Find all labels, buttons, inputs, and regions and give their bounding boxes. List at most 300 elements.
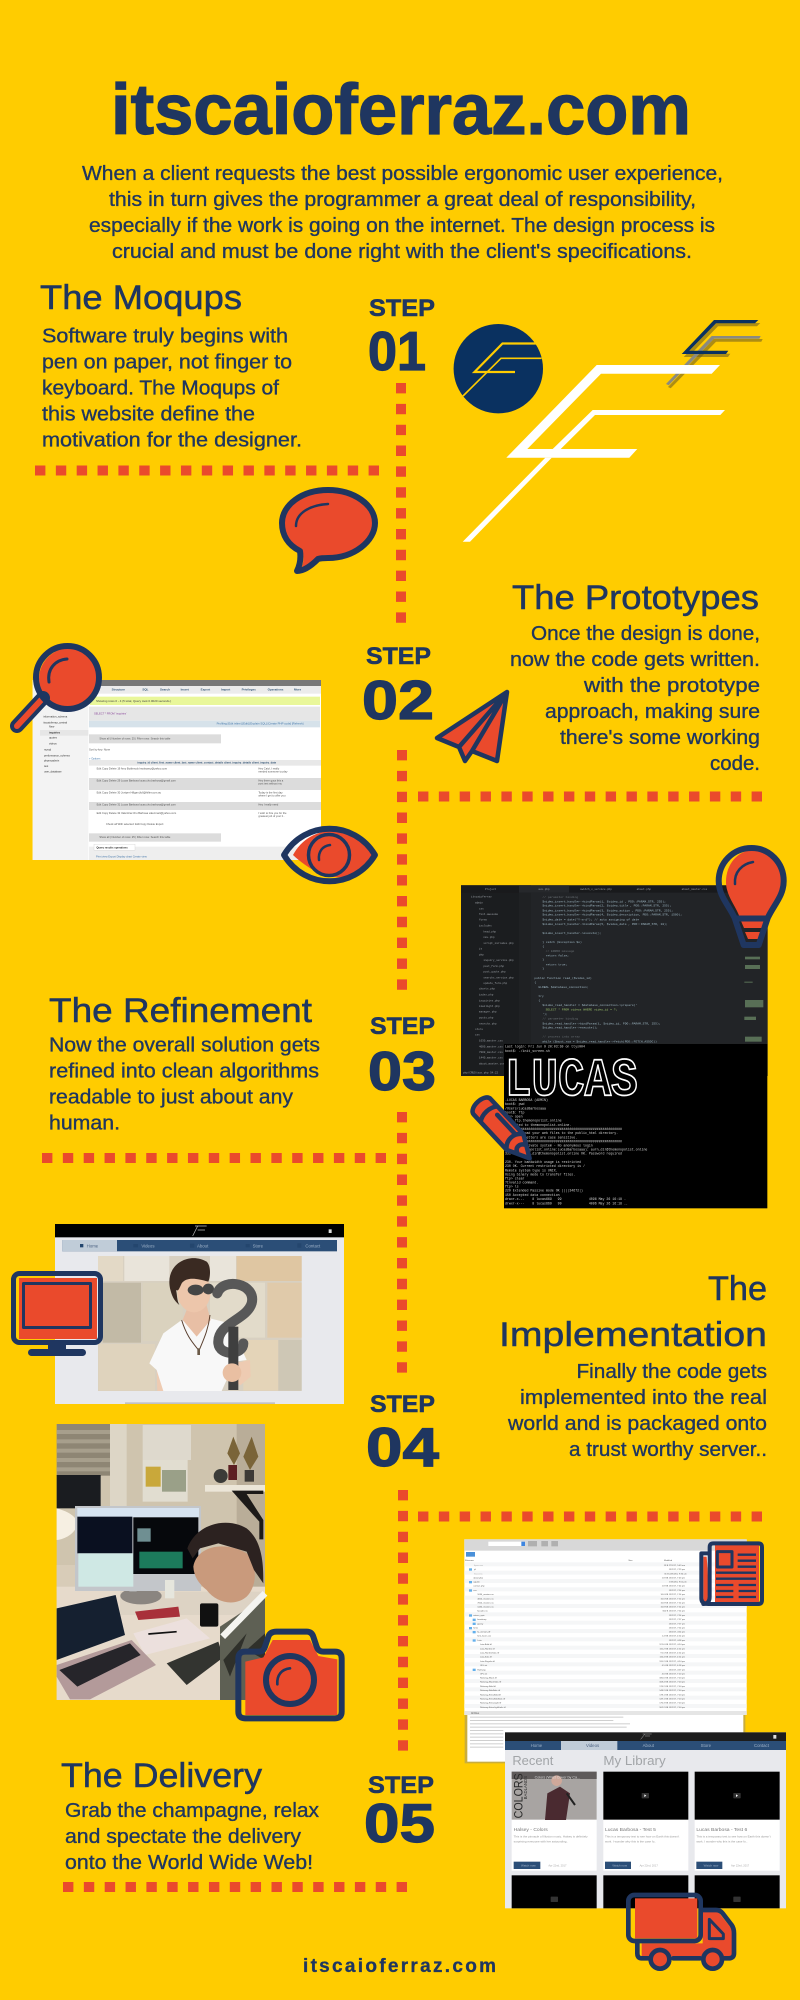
screenshot: database admin table: SELECT * FROM `inquiries` [94, 712, 127, 716]
screenshot: database admin table: test [44, 764, 49, 768]
screenshot: website video library: Colors (Wrist Cover by Ca... [535, 1776, 580, 1780]
screenshot: code editor: post_form.php [483, 964, 504, 968]
photo: developer at desk [57, 1424, 265, 1700]
screenshot: file transfer client: jquery [476, 1622, 484, 1625]
screenshot: file transfer client: Lato [477, 1639, 482, 1642]
screenshot: code editor: try [538, 994, 544, 998]
screenshot: code editor: nav.php [483, 935, 495, 939]
screenshot: website video library: Halsey - Colors [514, 1827, 548, 1833]
heading: The Implementation: The [708, 1270, 767, 1308]
screenshot: file transfer client: fa_version_tff [477, 1631, 491, 1634]
screenshot: code editor: css [479, 907, 484, 910]
screenshot: file transfer client: Filename [465, 1560, 475, 1562]
screenshot: file transfer client: ftpaccess [474, 1564, 483, 1567]
screenshot: code editor: } [542, 967, 544, 971]
screenshot: terminal: Connected to themonopolist.online. [505, 1123, 571, 1127]
icon: paper plane [437, 691, 508, 761]
screenshot: code editor: switch_x_service.php [580, 887, 612, 891]
screenshot: file transfer client: 13/2/17, 7:54 pm [669, 1627, 685, 1629]
screenshot: database admin table: greatest job of your li.. [258, 814, 285, 818]
screenshot: file transfer client: 178.1 KB 13/2/17, 7:00 pm [659, 1694, 685, 1696]
screenshot: database admin table: quotes [49, 736, 58, 740]
screenshot: terminal: boot$: ./init_screen.sh [505, 1049, 550, 1053]
screenshot: file transfer client: 4000_master.css [477, 1597, 494, 1600]
text: step 2 description: Once the design is done, [531, 623, 760, 645]
screenshot: code editor [461, 885, 768, 1076]
screenshot: code editor: $video_read_handler->execute(); [542, 1026, 598, 1030]
screenshot: website video library: This is a temporary test to see how on Earth this doesn't [696, 1835, 771, 1839]
screenshot: code editor: 4000_master.css [479, 1044, 503, 1048]
screenshot: code editor: font-awesome [479, 912, 499, 916]
text: step 1 description: motivation for the designer. [42, 430, 302, 452]
screenshot: terminal: This is a private system - No anonymous login [505, 1143, 593, 1147]
step label 01: STEP [369, 295, 435, 322]
screenshot: website video library [505, 1732, 786, 1908]
screenshot: file transfer client: 10.8 KB 13/2/17, 7:54 pm [661, 1602, 685, 1604]
screenshot: file transfer client: OFL.txt [480, 1672, 487, 1675]
heading: The Implementation: Implementation [499, 1316, 767, 1354]
screenshot: code editor: store [475, 1027, 483, 1031]
screenshot: website video library: work. I wonder why this is the case fo.. [696, 1839, 748, 1843]
screenshot: file transfer client: bootstrap [477, 1618, 487, 1621]
screenshot: database admin table: Insert [181, 688, 189, 692]
screenshot: website video library: BADLANDS [523, 1776, 528, 1799]
screenshot: database admin table: performance_schema [44, 753, 70, 757]
screenshot: file transfer client: cgi-bin [473, 1582, 480, 1584]
screenshot: file transfer client: 13/2/17, 4:54 pm [669, 1632, 685, 1634]
screenshot: terminal: ############################################################ [505, 1127, 622, 1131]
screenshot: terminal: 230 OK. Current restricted directory is / [505, 1164, 585, 1168]
screenshot: file transfer client [464, 1539, 747, 1763]
screenshot: terminal: boot$: ftp [505, 1110, 525, 1114]
screenshot: file transfer client: All Files [471, 1712, 480, 1715]
screenshot: code editor: searchx.php [479, 1021, 497, 1025]
screenshot: code editor: php/CRUD/aux.php 54:22 [463, 1070, 498, 1074]
screenshot: website video library: Watch now [704, 1863, 719, 1867]
screenshot: file transfer client: 13/2/17, 7:29 pm [669, 1569, 685, 1571]
screenshot: database admin table: Privileges [242, 688, 256, 692]
step label 04: STEP [370, 1391, 435, 1418]
screenshot: file transfer client: css [473, 1590, 477, 1592]
icon: pencil [469, 1094, 538, 1166]
screenshot: website video library: Lucas Barbosa - Test 5 [605, 1827, 656, 1833]
text: step 3 description: readable to just about any [49, 1086, 293, 1108]
screenshot: file transfer client: 13/2/17, 7:57 pm [669, 1619, 685, 1621]
screenshot: terminal: drwxr-x--- 8 lucas669 99 4096 May 26 16:18 . [505, 1197, 626, 1201]
screenshot: terminal: drwxr-x--- 8 lucas669 99 4096 May 26 16:18 .. [505, 1201, 628, 1205]
screenshot: database admin table: Edit Copy Delete 32 Valentina Chu Barbosa valenmart@yahoo.com [97, 811, 177, 815]
screenshot: database admin table: Edit Copy Delete 19 Amy Bottlerock heyitsamy@yahoo.com [97, 766, 168, 770]
screenshot: file transfer client: contact.php [473, 1585, 485, 1588]
screenshot: website video library: Home [531, 1743, 543, 1748]
screenshot: file transfer client: 4.6 KB 13/2/17, 7:00 pm [662, 1673, 685, 1675]
screenshot: code editor: inquiry_service.php [483, 958, 514, 962]
step label 03: STEP [370, 1013, 435, 1040]
text: step 2 description: approach, making sure [545, 701, 760, 723]
screenshot: website video library: Videos [586, 1743, 599, 1748]
screenshot: code editor: update_form.php [483, 981, 508, 985]
screenshot: database admin table: Check all With selected: Edit Copy Delete Export [106, 822, 164, 826]
panel: step 3 The Refinement [49, 992, 436, 1134]
screenshot: database admin table: phpmyadmin [44, 759, 60, 763]
heading: The Implementation [499, 1270, 767, 1354]
intro paragraph: this in turn gives the programmer a great deal of responsibility, [109, 189, 696, 211]
screenshot: file transfer client: htaccess [474, 1572, 483, 1575]
screenshot: database admin table: inquiry_id client_first_name client_last_name client_contact_details client_inquiry_details client_inquiry_date [137, 761, 277, 765]
screenshot: file transfer client: jd [473, 1569, 476, 1571]
text: step 5 description [65, 1800, 319, 1874]
screenshot: file transfer client: 176.3 KB 13/2/17, 7:00 pm [659, 1703, 685, 1705]
screenshot: terminal: Please upload your web files to the public_html directory. [505, 1131, 618, 1135]
screenshot: file transfer client: fonts [473, 1626, 478, 1629]
text: step 5 description: and spectate the delivery [65, 1826, 301, 1848]
screenshot: code editor: searchx_service.php [483, 975, 514, 979]
step label 05: 05 [364, 1792, 435, 1854]
screenshot: file transfer client: 91.5 KB 13/2/17, 4:54 pm [661, 1652, 685, 1654]
screenshot: terminal: ftp> ls [505, 1185, 519, 1189]
screenshot: database admin table: where I get to offer you [258, 793, 286, 797]
text: step 4 description: a trust worthy server.. [569, 1439, 767, 1461]
text: step 2 description: now the code gets written. [510, 649, 760, 671]
screenshot: code editor: // ERROR message [546, 949, 575, 953]
screenshot: file transfer client: Lato-Italic.ttf [480, 1656, 492, 1659]
step label 02: 02 [362, 669, 434, 731]
icon: delivery truck [628, 1895, 734, 1969]
screenshot: database admin table: Edit Copy Delete 31 Lucas Barbosa lucas.chu.barbosa@gmail.com [97, 802, 177, 806]
screenshot: file transfer client: 600 B 13/2/17, 7:54 pm [663, 1611, 685, 1613]
screenshot: database admin table: Show all | Number of rows: 25 | Filter rows: Search this table [99, 835, 171, 839]
screenshot: website video library: Recent [512, 1753, 554, 1768]
screenshot: file transfer client: 4.5 KB 13/2/17, 4:58 pm [662, 1665, 685, 1667]
screenshot: website video library: This is the pinnacle of Illusion music. Halsey is definitely [514, 1835, 588, 1839]
screenshot: website video library: Apr 22nd, 2017 [548, 1864, 567, 1868]
logo: small dark F mark [666, 320, 763, 388]
screenshot: code editor: script_includes.php [483, 941, 514, 945]
panel: step 2 The Prototypes [362, 579, 760, 775]
screenshot: file transfer client: 1440_master.css [477, 1606, 494, 1609]
screenshot: code editor: { [542, 944, 544, 948]
text: step 3 description: refined into clean algorithms [49, 1060, 319, 1082]
photo: man with electric violin [98, 1256, 302, 1391]
screenshot: code editor: '); [542, 1012, 548, 1016]
step label 05: STEP [368, 1772, 434, 1799]
screenshot: website home page: Videos [141, 1243, 154, 1248]
footer url: itscaioferraz.com [303, 1956, 496, 1977]
screenshot: code editor: return false; [546, 953, 569, 957]
screenshot: website video library: Watch now [612, 1863, 628, 1867]
screenshot: database admin table: videos [49, 741, 57, 745]
screenshot: terminal: Remote system type is UNIX. [505, 1168, 558, 1172]
text: step 4 description [507, 1361, 767, 1461]
screenshot: database admin table: Hey Caiol, I really [258, 766, 280, 770]
screenshot: file transfer client: 116.4 KB 13/2/17, 4:54 pm [659, 1657, 685, 1659]
screenshot: website video library: Apr 22nd, 2017 [640, 1864, 658, 1868]
text: step 4 description: implemented into the real [520, 1387, 767, 1409]
screenshot: database admin table: Print view Export Display chart Create view [96, 855, 147, 859]
text: step 3 description [49, 1034, 320, 1134]
screenshot: file transfer client: Size [628, 1560, 633, 1562]
screenshot: file transfer client: 13 B 27/5/17, 5:49 am [664, 1565, 685, 1567]
screenshot: code editor: while ($must_row = $video_read_handler->fetch(PDO::FETCH_ASSOC)) [542, 1039, 657, 1043]
screenshot: file transfer client: 115.2 KB 13/2/17, 4:54 pm [659, 1648, 685, 1650]
screenshot: terminal: (to) ftp.themonopolist.online [505, 1119, 562, 1123]
screenshot: file transfer client: 1030_master.css [477, 1593, 494, 1596]
screenshot: terminal: Note that letters are case sensitive. [505, 1135, 577, 1139]
screenshot: code editor: public function read_($video_id) [534, 976, 592, 980]
screenshot: file transfer client: facade.css [477, 1611, 488, 1613]
icon: newspaper [701, 1543, 762, 1604]
screenshot: website video library: About [643, 1743, 655, 1748]
screenshot: website video library: work. I wonder why this is the case fo.. [605, 1839, 656, 1843]
screenshot: file transfer client: about.php [473, 1576, 484, 1579]
screenshot: database admin table: inquiries [49, 730, 61, 734]
screenshot: database admin table: New [49, 725, 54, 729]
screenshot: terminal: ftp> open [505, 1115, 523, 1119]
screenshot: file transfer client: 1.8 KB 13/2/17, 7:44 pm [662, 1586, 685, 1588]
screenshot: website video library: This is a temporary test to see how on Earth this doesn't [605, 1835, 679, 1839]
screenshot: database admin table: user_database [44, 770, 62, 774]
screenshot: code editor: posts.php [479, 1016, 494, 1020]
screenshot: file transfer client: 162.2 KB 13/2/17, 7:00 pm [659, 1707, 685, 1709]
screenshot: code editor: $video_insert_handler->execute(); [542, 931, 602, 935]
screenshot: database admin table: Profiling [Edit inline] [Edit] [Explain SQL] [Create PHP code] [Refresh] [217, 721, 304, 725]
screenshot: database admin table: Query results operations [96, 845, 128, 849]
screenshot: file transfer client: Modified [664, 1560, 673, 1562]
screenshot: website video library: Watch now [521, 1863, 536, 1867]
screenshot: database admin table: itscaioferraz_central [43, 720, 68, 724]
screenshot: terminal [504, 1044, 767, 1208]
screenshot: file transfer client: 148.2 KB 13/2/17, 7:00 pm [659, 1690, 685, 1692]
screenshot: code editor: { [534, 980, 536, 984]
screenshot: code editor: index.php [479, 993, 494, 997]
intro paragraph [82, 163, 723, 263]
screenshot: file transfer client: Lato-HairlineItalic.ttf [480, 1651, 499, 1654]
screenshot: database admin table: + Options [89, 756, 101, 760]
intro paragraph: When a client requests the best possible ergonomic user experience, [82, 163, 723, 185]
screenshot: code editor: aux.php [538, 887, 550, 891]
icon: magnifying glass [17, 646, 101, 726]
screenshot: website video library: My Library [603, 1753, 666, 1768]
screenshot: file transfer client: 168.4 KB 13/2/17, 7:00 pm [659, 1682, 685, 1684]
screenshot: code editor: // parameter binding [542, 1017, 578, 1021]
step label 02 [362, 643, 434, 731]
screenshot: database admin table: Structure [112, 688, 125, 692]
screenshot: file transfer client: 7000_master.css [477, 1601, 494, 1604]
screenshot: file transfer client: 31 B 22/10/16, 9:30 am [664, 1573, 687, 1575]
screenshot: terminal: LUCAS [505, 1052, 638, 1112]
screenshot: website video library: surprising everyone with her astounding.. [514, 1839, 568, 1843]
intro paragraph: especially if the work is going on the internet. The design process is [89, 215, 715, 237]
text: step 1 description: pen on paper, not finger to [42, 352, 292, 374]
screenshot: code editor: $video_date = date("Y-m-d"); // auto assigning of date [542, 917, 639, 921]
text: step 1 description: Software truly begins with [42, 326, 288, 348]
screenshot: code editor: 1030_master.css [479, 1038, 503, 1042]
screenshot: code editor: itscaioferraz [471, 894, 492, 898]
screenshot: database admin table: post test without my [258, 781, 282, 785]
screenshot: code editor: // parameter binding [542, 895, 578, 899]
screenshot: database admin table: Hey I really need [258, 802, 279, 806]
screenshot: database admin table: Sort by key: None [89, 747, 111, 751]
screenshot: code editor: inquiries.php [479, 998, 500, 1002]
screenshot: file transfer client: Raleway-BoldItalic.ttf [480, 1689, 501, 1692]
screenshot: file transfer client: 10.6 KB 13/2/17, 7:54 pm [661, 1594, 685, 1596]
dotted vertical timeline [35, 383, 763, 1887]
screenshot: database admin table: Edit Copy Delete 29 Lucas Barbosa lucas.chu.barbosa@gmail.com [97, 778, 177, 782]
screenshot: database admin table: Operations [268, 688, 284, 692]
screenshot: code editor: return true; [546, 962, 567, 966]
screenshot: code editor: manager.php [479, 1010, 497, 1014]
screenshot: code editor: js [479, 947, 483, 951]
screenshot: code editor: $video_insert_handler->bindParam(4, $video_description, PDO::PARAM_STR, 1500); [542, 913, 682, 917]
screenshot: file transfer client: extern_apis [473, 1614, 484, 1617]
screenshot: code editor: $video_insert_handler->bindParam(1, $video_id , PDO::PARAM_STR, 255); [542, 899, 666, 903]
screenshot: website video library: Apr 22nd, 2017 [731, 1864, 750, 1868]
step label 03 [368, 1013, 436, 1102]
step label 02: STEP [366, 643, 431, 670]
text: step 1 description: this website define the [42, 404, 255, 426]
icon: monitor [14, 1274, 100, 1356]
screenshot: file transfer client: 13/2/17, 7:57 pm [669, 1623, 685, 1625]
screenshot: file transfer client: 176.2 KB 13/2/17, 7:00 pm [659, 1686, 685, 1688]
icon: light bulb [719, 848, 785, 945]
screenshot: code editor: Project [485, 887, 497, 891]
screenshot: file transfer client: 1.8 KB 13/2/17, 7:43 pm [662, 1577, 685, 1579]
heading: The Delivery: The Delivery [61, 1757, 262, 1795]
screenshot: file transfer client: 13/2/17, 4:57 pm [669, 1669, 685, 1671]
screenshot: database admin table: Show all | Number of rows: 25 | Filter rows: Search this table [99, 737, 171, 741]
screenshot: code editor: $video_read_handler = $database_connection->prepare(' [542, 1003, 637, 1007]
screenshot: database admin table: Search [160, 688, 170, 692]
screenshot: code editor: } catch (Exception $e) [542, 940, 582, 944]
text: step 2 description [510, 623, 760, 775]
screenshot: terminal: /Users/LucasBarbosaaa [505, 1106, 546, 1110]
screenshot: database admin table: mysql [44, 748, 51, 752]
screenshot: terminal: ############################################################ [505, 1139, 622, 1143]
screenshot: code editor: about_master.css [479, 1061, 505, 1065]
text: step 5 description: onto the World Wide Web! [65, 1852, 313, 1874]
screenshot: file transfer client: 10.8 KB 13/2/17, 7:54 pm [661, 1607, 685, 1609]
step label 05 [364, 1772, 435, 1854]
screenshot: database admin table [33, 680, 321, 860]
step label 04 [366, 1391, 439, 1478]
screenshot: database admin table: Today is the first day [258, 790, 283, 794]
screenshot: code editor: { [538, 998, 540, 1002]
screenshot: code editor: 1440_master.css [479, 1056, 503, 1060]
screenshot: database admin table: Hey there guys this a [258, 778, 284, 782]
screenshot: terminal: ?Invalid command. [505, 1181, 538, 1185]
screenshot: code editor: about_master.css [682, 887, 708, 891]
screenshot: website home page: Contact [305, 1243, 321, 1248]
screenshot: database admin table: information_schema [43, 715, 68, 719]
screenshot: code editor: admin [475, 900, 483, 904]
screenshot: terminal: Using binary mode to transfer files. [505, 1172, 575, 1176]
panel: step 4 The Implementation [366, 1270, 767, 1478]
text: step 1 description [42, 326, 302, 452]
screenshot: file transfer client: 149.1 KB 13/2/17, 7:00 pm [659, 1698, 685, 1700]
screenshot: code editor: post_quote.php [483, 970, 506, 974]
text: step 2 description: code. [710, 753, 760, 775]
screenshot: database admin table: SQL [142, 688, 149, 692]
screenshot: database admin table: Edit Copy Delete 30 Juniper Hillgan jfoll@hifier.com.au [97, 790, 162, 794]
step label 01 [368, 295, 435, 382]
heading: The Moqups: The Moqups [40, 279, 242, 317]
icon: camera [238, 1632, 342, 1718]
intro paragraph: crucial and must be done right with the client's specifications. [112, 241, 692, 263]
screenshot: database admin table: More [294, 688, 301, 692]
screenshot: terminal: -LUCAS BARBOSA (ADMIN) [505, 1098, 548, 1102]
screenshot: code editor: $video_insert_handler->bindParam(5, $video_date , PDO::PARAM_STR, 10); [542, 922, 668, 926]
text: step 1 description: keyboard. The Moqups of [42, 378, 279, 400]
screenshot: website home page: Store [253, 1243, 264, 1248]
text: step 3 description: human. [49, 1112, 120, 1134]
screenshot: file transfer client: Raleway-ExtraLightItalic.ttf [480, 1706, 506, 1709]
screenshot: website home page: About [197, 1243, 209, 1248]
screenshot: file transfer client: 13/2/17, 7:54 pm [669, 1590, 685, 1592]
screenshot: file transfer client: 19/10/16, 9:01 pm [669, 1582, 687, 1584]
screenshot: file transfer client: Raleway [477, 1669, 487, 1671]
screenshot: file transfer client: Lato-Regular.ttf [480, 1660, 495, 1663]
screenshot: database admin table: Export [201, 688, 210, 692]
screenshot: website video library: COLORS [511, 1773, 525, 1818]
screenshot: code editor: // process into array [542, 1035, 580, 1039]
screenshot: file transfer client: Raleway-ExtraBoldItalic.ttf [480, 1697, 506, 1700]
screenshot: file transfer client: 10.6 KB 13/2/17, 7:54 pm [661, 1598, 685, 1600]
screenshot: file transfer client: Raleway-Black.ttf [480, 1677, 497, 1680]
screenshot: file transfer client: Raleway-ExtraBold.ttf [480, 1693, 501, 1696]
panel: step 5 The Delivery [61, 1757, 435, 1874]
screenshot: terminal: Name (themonopolist.online:LucasBarbosaaa): aurn_dir@themonopolist.online [505, 1148, 647, 1152]
text: step 4 description: Finally the code gets [576, 1361, 767, 1383]
screenshot: file transfer client: font_faces.css [477, 1635, 491, 1638]
heading: The Prototypes: The Prototypes [512, 579, 759, 617]
screenshot: website video library: Contact [754, 1743, 770, 1748]
screenshot: code editor: includes [479, 924, 492, 928]
step label 04: 04 [366, 1416, 439, 1478]
screenshot: code editor: 7000_master.css [479, 1050, 503, 1054]
screenshot: code editor: forms [479, 918, 487, 922]
screenshot: database admin table: needed someone to play [258, 769, 288, 773]
screenshot: database admin table: Showing rows 0 - 4 (5 total, Query took 0.0020 seconds.) [96, 699, 171, 703]
screenshot: file transfer client: Raleway-Bold.ttf [480, 1685, 496, 1688]
screenshot: file transfer client: OFL.txt [480, 1664, 487, 1667]
screenshot: code editor: charts.php [479, 987, 495, 991]
screenshot: file transfer client: 1.4 KB 13/2/17, 4:54 pm [662, 1636, 685, 1638]
text: step 2 description: with the prototype [583, 675, 760, 697]
screenshot: code editor: $video_insert_handler->bindParam(2, $video_title , PDO::PARAM_STR, 255); [542, 904, 671, 908]
screenshot: file transfer client: Raleway-ExtraLight.ttf [480, 1702, 501, 1705]
screenshot: terminal: Last login: Fri Jun 9 20:03:59 on ttys004 [505, 1045, 585, 1049]
screenshot: file transfer client: 120.2 KB 13/2/17, 4:54 pm [659, 1661, 685, 1663]
text: step 3 description: Now the overall solution gets [49, 1034, 320, 1056]
screenshot: code editor: head.php [483, 929, 496, 933]
screenshot: code editor: css [475, 1034, 480, 1037]
screenshot: code editor: SELECT * FROM videos WHERE video_id = ?; [546, 1008, 618, 1012]
screenshot: file transfer client: 180.6 KB 13/2/17, 7:00 pm [659, 1678, 685, 1680]
text: step 2 description: there's some working [560, 727, 760, 749]
title: itscaioferraz.com [111, 71, 691, 150]
screenshot: code editor: $video_read_handler->bindParam(1, $video_id, PDO::PARAM_STR, 255); [542, 1021, 661, 1025]
screenshot: file transfer client: Lato-Hairline.ttf [480, 1647, 495, 1650]
screenshot: code editor: GLOBAL $database_connection; [538, 985, 589, 989]
screenshot: website video library: Store [701, 1743, 712, 1748]
logo: circle badge [454, 324, 543, 413]
screenshot: code editor: about.php [637, 887, 651, 891]
screenshot: code editor: } [542, 958, 544, 962]
screenshot: file transfer client: 121.6 KB 13/2/17, 4:54 pm [659, 1644, 685, 1646]
text: step 4 description: world and is packaged onto [507, 1413, 767, 1435]
heading: The Refinement: The Refinement [49, 992, 313, 1030]
screenshot: website home page: Home [87, 1243, 99, 1248]
